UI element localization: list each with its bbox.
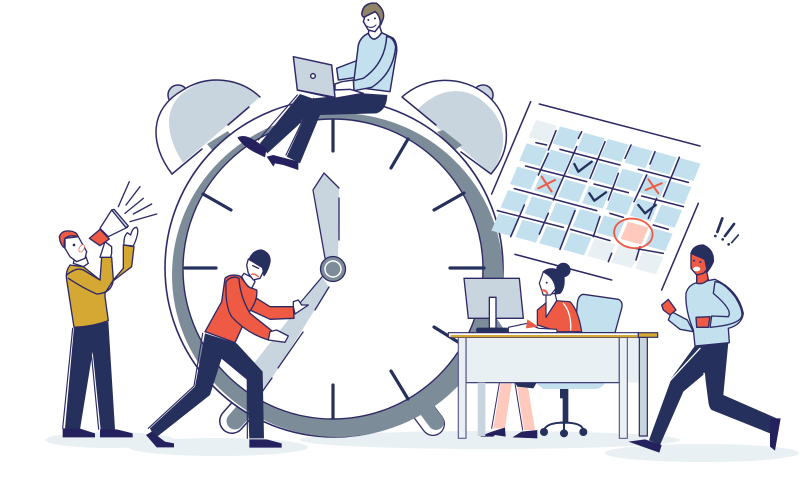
check marks: [574, 162, 656, 213]
clock hand short: [245, 277, 329, 392]
exclamation marks: [715, 218, 738, 244]
megaphone man head: [59, 231, 88, 267]
icon: left bell: [156, 80, 260, 174]
man head: [362, 3, 384, 39]
panel: desk with woman: [448, 263, 658, 438]
alarm clock: [156, 80, 506, 437]
icon: right bell: [402, 80, 506, 174]
man pushing clock hand: [146, 250, 308, 448]
runner legs: [628, 343, 781, 453]
floor shadows: [45, 431, 799, 462]
man torso: [335, 33, 397, 92]
panel: calendar: [491, 102, 701, 290]
pusher torso: [205, 275, 308, 343]
man legs: [237, 93, 387, 170]
icon: megaphone: [89, 182, 157, 246]
icon: laptop: [293, 57, 363, 98]
runner head: [691, 245, 713, 284]
calendar grid lines: [492, 102, 700, 290]
clock hub: [320, 256, 346, 282]
cross marks: [538, 177, 662, 193]
megaphone man legs: [63, 322, 133, 437]
man running: [628, 218, 781, 453]
office chair: [535, 294, 622, 437]
megaphone man torso: [66, 227, 138, 327]
deadline ring: [612, 216, 655, 251]
desk: [448, 333, 658, 438]
pusher head: [242, 250, 270, 288]
calendar cells: [491, 126, 701, 255]
man with megaphone: [59, 182, 157, 437]
clock feet: [232, 395, 436, 424]
clock tick marks: [185, 120, 484, 418]
clock hand long: [313, 173, 339, 262]
calendar highlighted day: [621, 222, 649, 245]
woman: [480, 263, 582, 438]
man with laptop sitting on clock: [237, 3, 397, 170]
monitor: [464, 278, 523, 333]
clock body ring: [165, 99, 503, 437]
calendar pale cells: [529, 120, 663, 274]
runner torso: [662, 279, 743, 346]
pusher legs: [146, 333, 282, 448]
